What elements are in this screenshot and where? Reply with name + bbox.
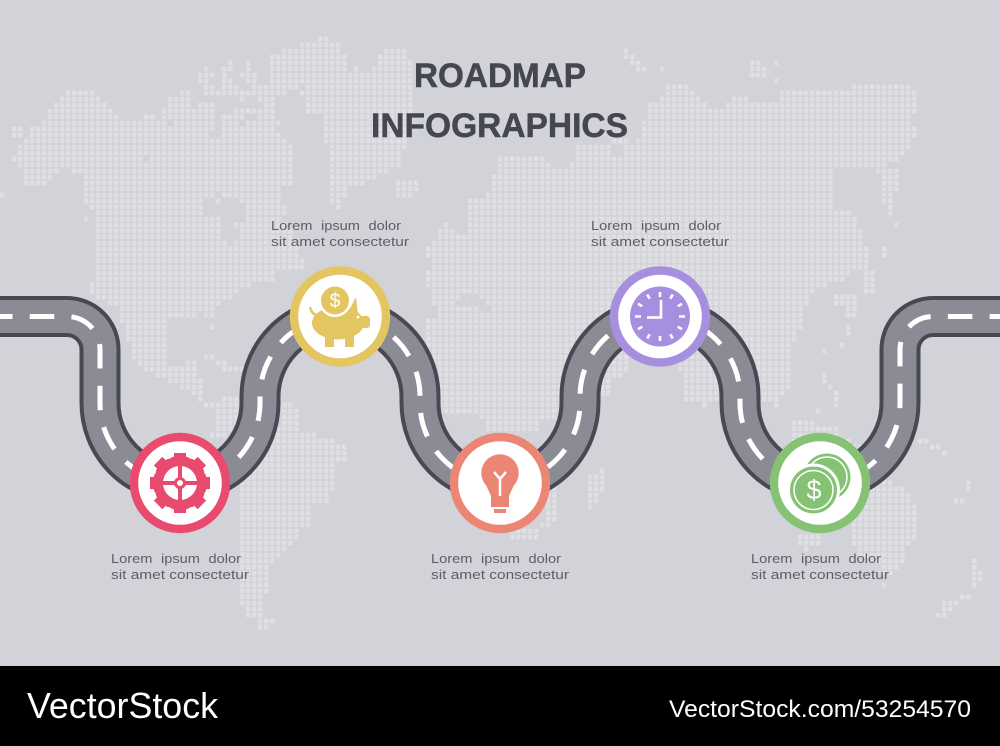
footer bar (0, 666, 1000, 746)
milestone 2: piggy bank icon (294, 270, 386, 362)
text block: milestone 3: Lorem ipsum dolor (431, 551, 562, 566)
winding road (0, 316, 1000, 483)
footer logo text: VectorStock (27, 685, 219, 726)
title (371, 57, 628, 145)
milestone 3: light bulb icon (454, 437, 546, 529)
text block: milestone 2 (271, 218, 410, 249)
icon: light bulb (481, 454, 519, 513)
text block: milestone 5: sit amet consectetur (751, 567, 890, 582)
text block: milestone 1 (111, 551, 250, 582)
milestone 5: coins icon (774, 437, 866, 529)
icon: gear (146, 449, 214, 517)
text block: milestone 3: sit amet consectetur (431, 567, 570, 582)
title: INFOGRAPHICS (371, 107, 628, 145)
milestone 4: clock icon (614, 270, 706, 362)
icon: coins: $ (806, 475, 822, 505)
text block: milestone 2: sit amet consectetur (271, 234, 410, 249)
footer url text: VectorStock.com/53254570 (669, 696, 971, 723)
text block: milestone 5 (751, 551, 890, 582)
title: ROADMAP (414, 57, 586, 95)
text block: milestone 1: sit amet consectetur (111, 567, 250, 582)
text block: milestone 5: Lorem ipsum dolor (751, 551, 882, 566)
text block: milestone 1: Lorem ipsum dolor (111, 551, 242, 566)
text block: milestone 3 (431, 551, 570, 582)
text block: milestone 4: Lorem ipsum dolor (591, 218, 722, 233)
dotted world map background (0, 39, 984, 627)
text block: milestone 4 (591, 218, 730, 249)
text block: milestone 2: Lorem ipsum dolor (271, 218, 402, 233)
milestone 1: gear icon (134, 437, 226, 529)
text block: milestone 4: sit amet consectetur (591, 234, 730, 249)
icon: clock (630, 286, 690, 346)
icon: piggy bank: $ (330, 291, 341, 312)
